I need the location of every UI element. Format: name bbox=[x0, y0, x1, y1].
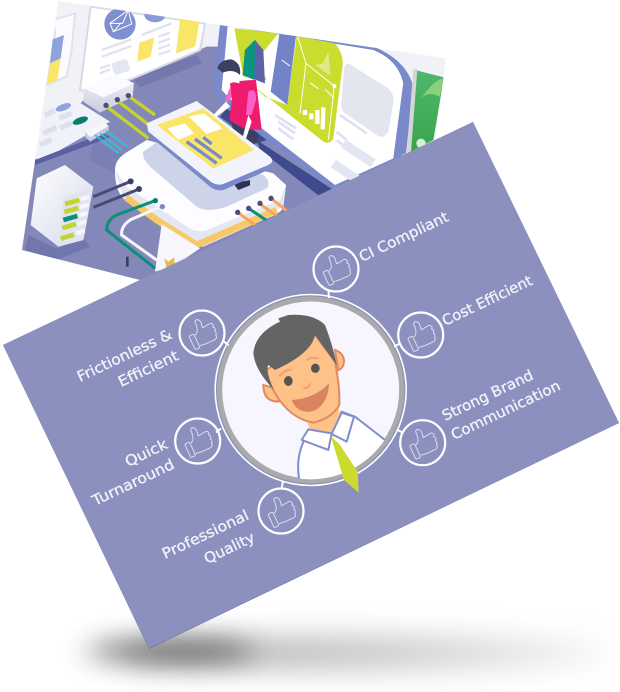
tie bbox=[331, 437, 359, 493]
panel: purple card bbox=[3, 122, 619, 649]
central base bbox=[93, 140, 287, 268]
person bbox=[214, 59, 262, 144]
green chart panels bbox=[234, 28, 343, 143]
floor shading bbox=[133, 55, 202, 87]
icon: thumbs up, CI Compliant bbox=[314, 246, 358, 292]
icon: thumbs up, Professional Quality bbox=[258, 488, 304, 534]
white block with yellow crown bbox=[126, 224, 200, 272]
back wall panel with envelope bbox=[80, 7, 205, 92]
keyboard bbox=[35, 97, 127, 165]
label: Strong Brand: Strong Brand bbox=[440, 368, 536, 425]
right wall blue frame bbox=[213, 25, 412, 190]
icon: smiling man portrait bbox=[253, 315, 387, 493]
label: Frictionless &: Frictionless & bbox=[75, 327, 175, 386]
label: Professional: Professional bbox=[160, 508, 252, 563]
face bbox=[267, 335, 339, 423]
icon: thumbs up, Cost Efficient bbox=[398, 312, 443, 358]
nose bbox=[303, 383, 311, 388]
label: CI Compliant: CI Compliant bbox=[357, 209, 452, 266]
label: Quality: Quality bbox=[202, 530, 258, 568]
label: Cost Efficient: Cost Efficient bbox=[440, 273, 536, 330]
icon: thumbs up, Frictionless and Efficient bbox=[180, 310, 224, 356]
collar bbox=[302, 413, 354, 450]
connectors bbox=[216, 291, 403, 489]
icon: thumbs up, Quick Turnaround bbox=[175, 418, 220, 464]
right wall placeholders bbox=[275, 63, 394, 182]
eyes bbox=[284, 376, 293, 386]
label: Quick: Quick bbox=[123, 437, 171, 471]
dark wall base bbox=[257, 140, 333, 197]
label: Turnaround: Turnaround bbox=[89, 457, 177, 510]
server tower bbox=[31, 165, 93, 247]
shirt bbox=[297, 410, 386, 480]
icon: thumbs up, Strong Brand Communication bbox=[400, 420, 445, 465]
tablet bbox=[147, 101, 272, 190]
label: Efficient: Efficient bbox=[116, 348, 182, 391]
illustration: isometric workspace photo bbox=[22, 1, 446, 280]
brows bbox=[279, 358, 319, 377]
mouth bbox=[292, 383, 329, 412]
left wall panel bbox=[47, 13, 75, 85]
ground shadow bbox=[85, 636, 610, 670]
hair bbox=[253, 315, 337, 390]
central portrait ring bbox=[215, 294, 406, 486]
neck bbox=[307, 407, 340, 437]
ears bbox=[263, 385, 280, 402]
floor bbox=[20, 47, 337, 283]
label: Communication: Communication bbox=[449, 378, 563, 444]
router top bbox=[83, 74, 155, 138]
